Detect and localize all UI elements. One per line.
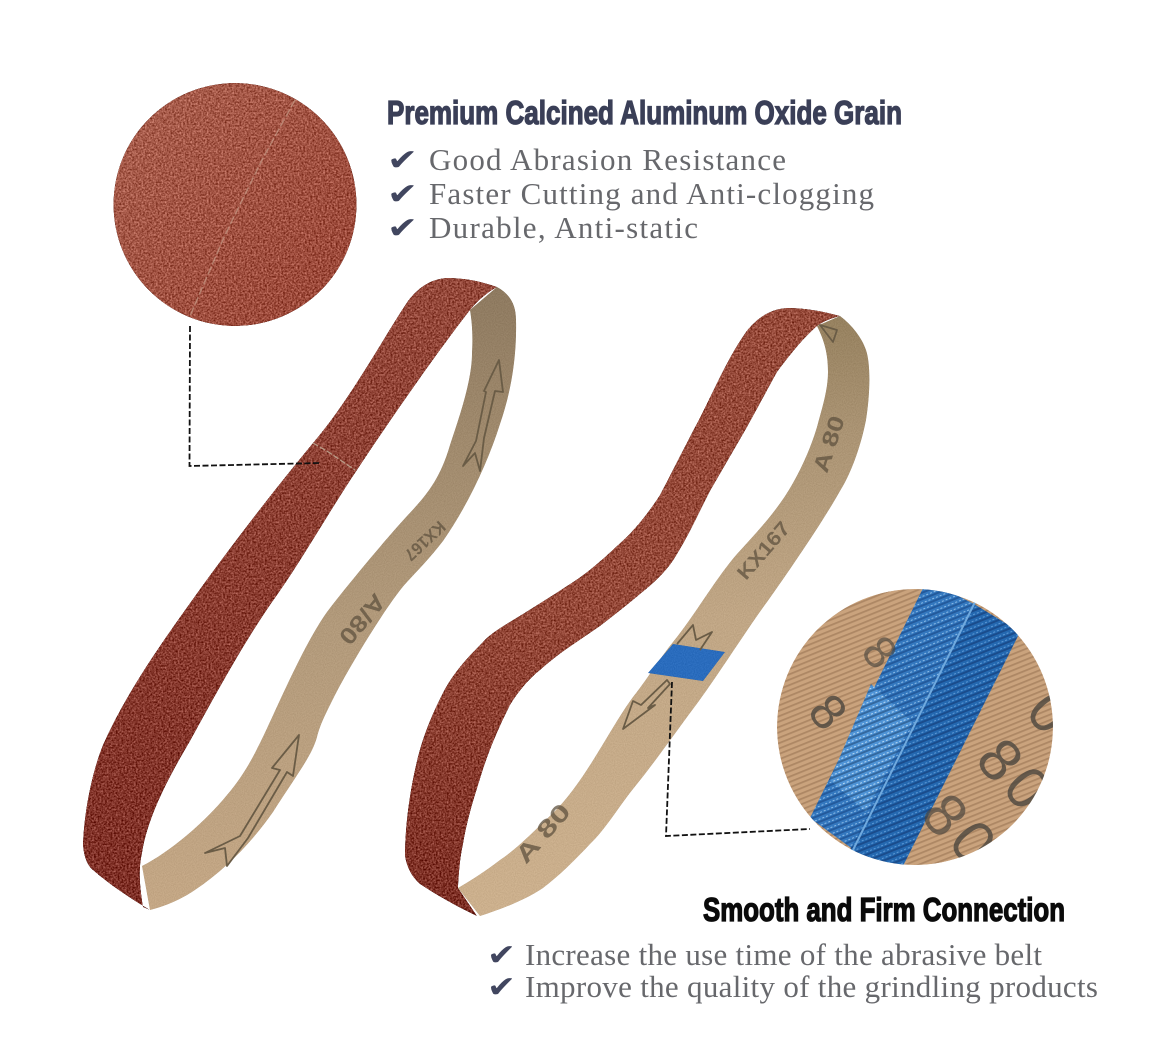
blue tape lighter patch: [830, 684, 912, 812]
top arrow tip: [820, 325, 837, 342]
printed numerals: 8: [964, 726, 1036, 794]
feature list: connection benefits: ✔: [487, 970, 516, 1005]
feature list: grain benefits: Good Abrasion Resistance: [429, 142, 786, 177]
detail circle: blue joint close-up: [777, 589, 1053, 865]
leader line: blue joint to detail circle: [666, 682, 810, 836]
print: A 80 upper: A 80: [808, 413, 850, 476]
print: A 80 lower: A 80: [510, 798, 576, 869]
feature list: grain benefits: ✔: [387, 143, 418, 178]
detail circle: abrasive grain surface: [114, 83, 356, 326]
belt abrasive face: [83, 278, 497, 910]
belt splice seam: [313, 443, 355, 470]
feature list: connection benefits: Improve the quality of the grindling products: [525, 969, 1098, 1004]
printed numerals: 0: [1014, 678, 1086, 746]
belt inner backing: [458, 316, 869, 916]
woven backing: [777, 589, 1053, 865]
belt abrasive face: [405, 308, 840, 916]
blue tape upper left half: [810, 580, 974, 850]
lower direction arrow: [623, 680, 670, 729]
printed numerals: 0: [991, 754, 1063, 822]
feature list: connection benefits: ✔: [487, 938, 516, 973]
feature list: connection benefits: Increase the use time of the abrasive belt: [525, 937, 1042, 972]
printed numerals: 8: [909, 781, 981, 849]
belt inner backing: [142, 287, 516, 910]
printed numerals: 0: [937, 808, 1009, 876]
printed numerals: 8: [798, 683, 858, 741]
lower direction arrow: [205, 735, 299, 866]
belt: left abrasive belt: [83, 278, 516, 910]
feature list: grain benefits: [387, 142, 874, 246]
feature list: grain benefits: Faster Cutting and Anti-clogging: [429, 176, 874, 211]
print: KX167: KX167: [400, 517, 449, 564]
heading: aluminum oxide grain: Premium Calcined Aluminum Oxide Grain: [387, 94, 902, 131]
blue tape darker half: [850, 604, 1020, 872]
seam highlight: [853, 602, 975, 850]
blue joint tape: [648, 644, 725, 681]
print: A 80: A/80: [334, 589, 391, 650]
printed numerals: 8: [852, 625, 908, 679]
print: KX167: KX167: [733, 518, 795, 584]
feature list: grain benefits: ✔: [387, 177, 418, 212]
heading: firm connection: Smooth and Firm Connection: [703, 891, 1065, 928]
feature list: grain benefits: Durable, Anti-static: [429, 210, 698, 245]
upper direction arrow: [463, 360, 503, 471]
leader line: grain circle to belt splice: [190, 326, 320, 466]
belt: right abrasive belt: [405, 308, 869, 916]
feature list: connection benefits: [487, 937, 1098, 1005]
upper arrow tail: [677, 625, 712, 650]
feature list: grain benefits: ✔: [387, 211, 418, 246]
printed numerals: [811, 637, 1053, 858]
